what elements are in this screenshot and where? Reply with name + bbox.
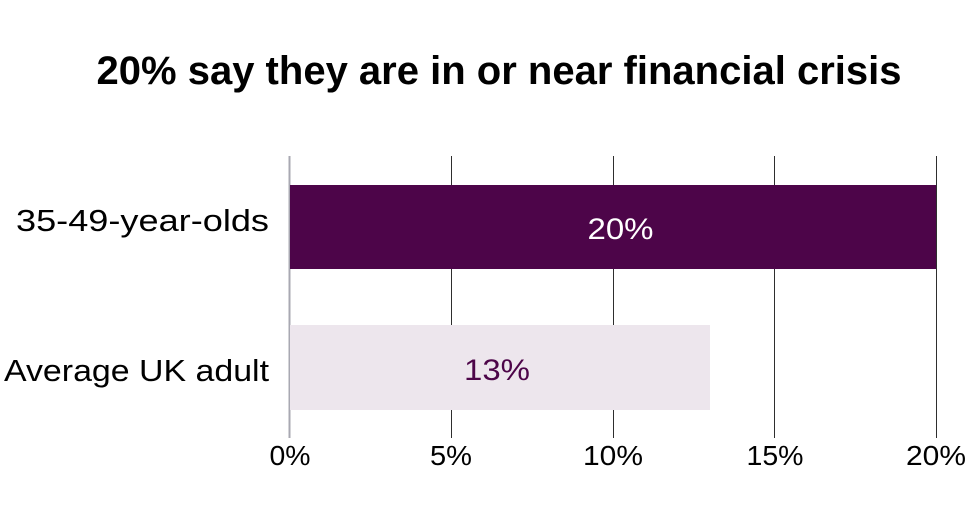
x axis labels [270, 440, 966, 471]
x axis labels: 5% [430, 440, 472, 471]
category label: Average UK adult: Average UK adult [4, 353, 269, 388]
category label: 35-49-year-olds: 35-49-year-olds [16, 203, 269, 238]
x axis labels: 20% [906, 440, 966, 471]
title: 20% say they are in or near financial crisis [96, 49, 902, 93]
bar: Average UK adult: 13% [464, 354, 530, 387]
x axis labels: 0% [270, 440, 310, 471]
bar chart [4, 156, 966, 471]
x axis labels: 15% [746, 440, 804, 471]
bar: 35-49-year-olds [290, 185, 936, 269]
x axis labels: 10% [583, 440, 643, 471]
bar: 35-49-year-olds: 20% [588, 213, 654, 246]
bar: Average UK adult [290, 325, 710, 410]
